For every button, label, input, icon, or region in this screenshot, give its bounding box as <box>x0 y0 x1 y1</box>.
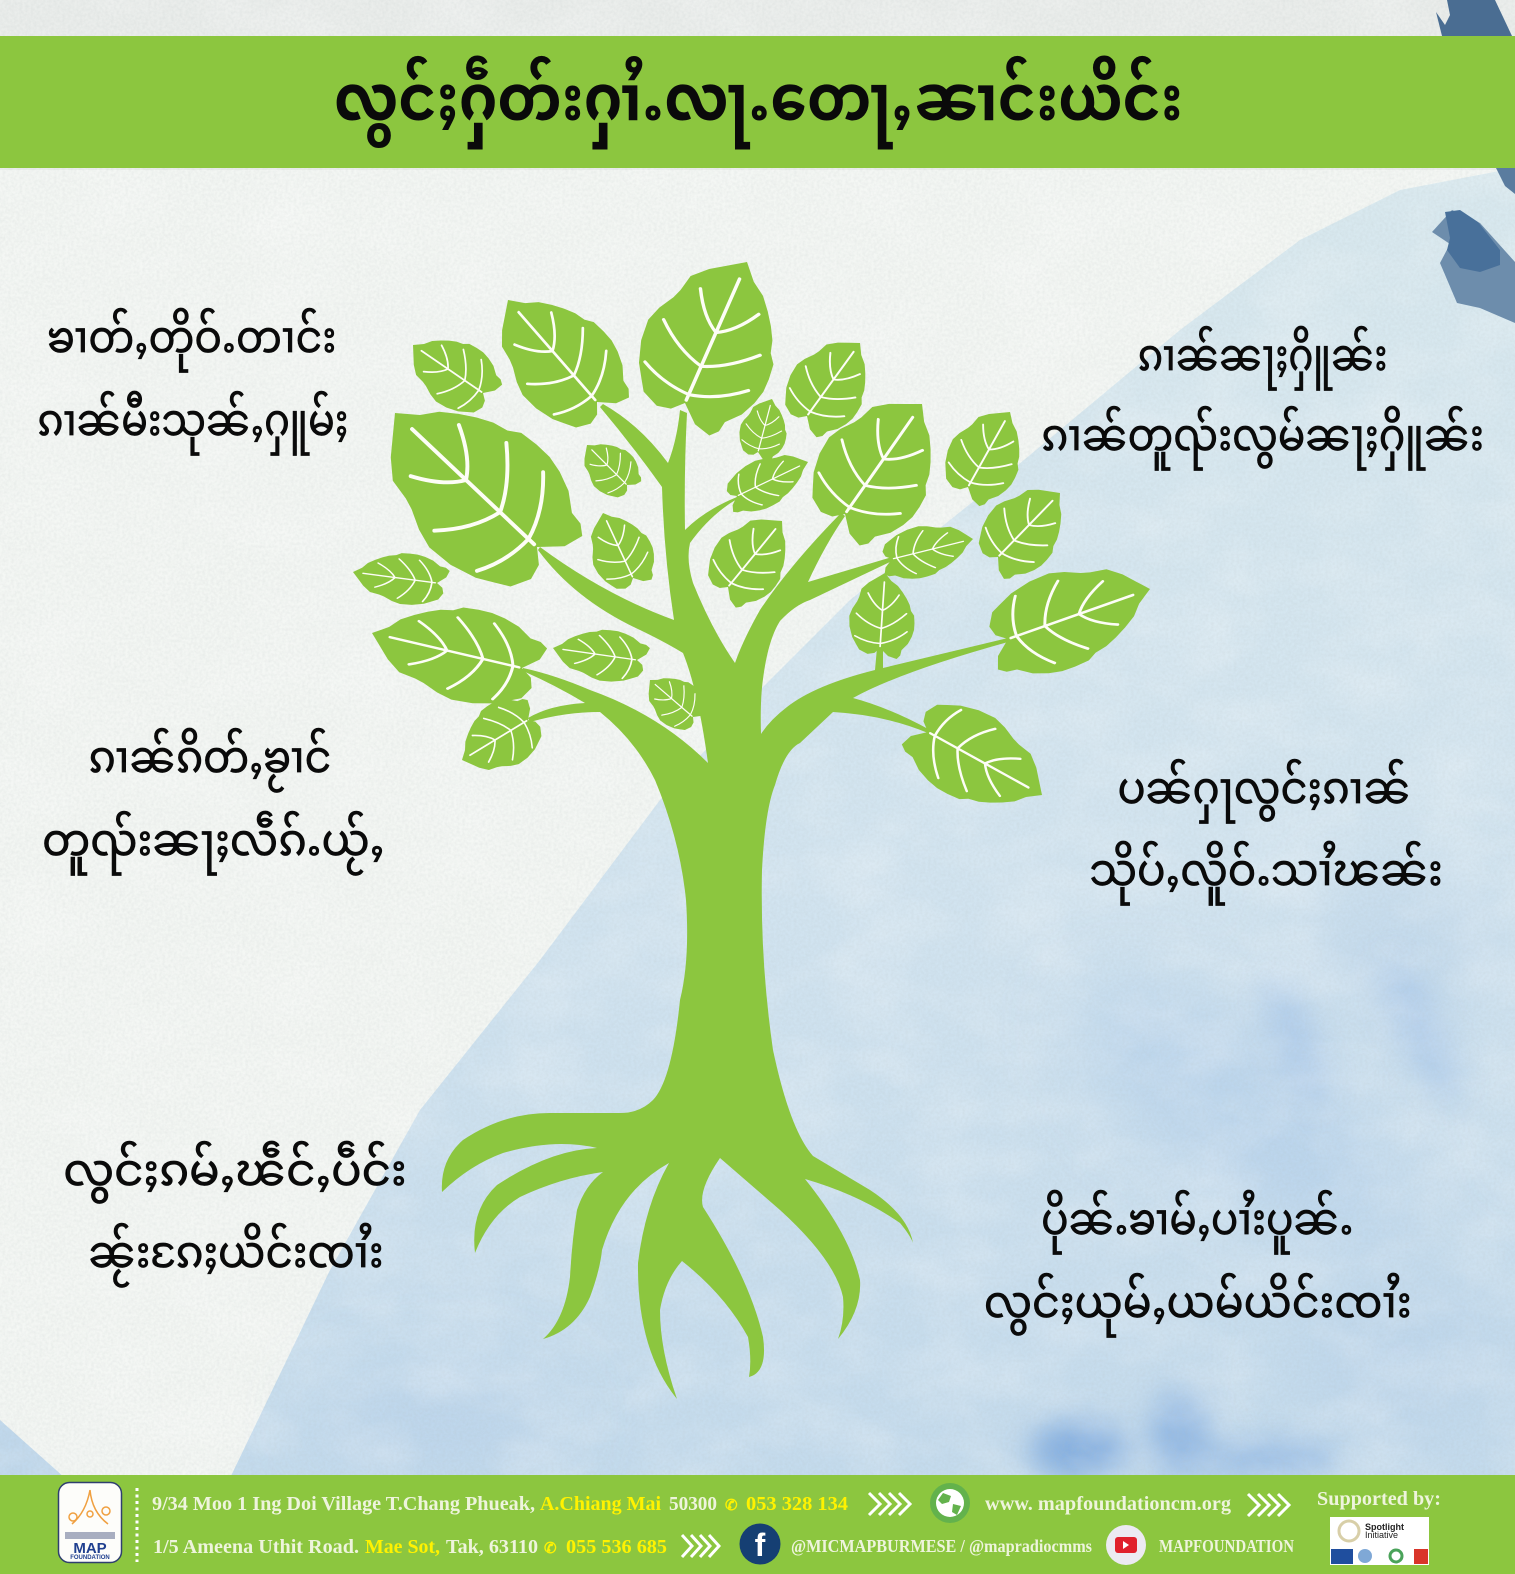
title: လွင်ႈႁဵတ်းႁၢႆႉလႃႉတေႃႇၼၢင်းယိင်း <box>334 54 1183 150</box>
text block: right bottom: လွင်ႈယုမ်ႇယမ်ယိင်းၸၢႆး <box>984 1272 1412 1338</box>
text block: left bottom: လွင်ႈၵမ်ႇၽဵင်ႇပဵင်း <box>63 1140 407 1204</box>
icon: chevrons 2 <box>1248 1494 1289 1516</box>
social handles: @MICMAPBURMESE / @mapradiocmms <box>791 1536 1092 1556</box>
address line 1: ✆ <box>725 1498 738 1514</box>
leaf 19 <box>963 467 1087 591</box>
leaf 2: top left <box>469 266 647 449</box>
text block: left bottom <box>63 1140 407 1288</box>
youtube channel: MAPFOUNDATION <box>1159 1536 1294 1556</box>
icon: youtube <box>1106 1525 1146 1565</box>
leaf 5 <box>570 428 649 507</box>
icon: facebook <box>740 1524 780 1564</box>
address line 2 <box>153 1536 667 1558</box>
background: blue watercolor panel <box>230 168 1515 1478</box>
leaf 1: large left <box>344 359 606 618</box>
text block: right top: ၵၢၼ်တူၺ်းလွမ်ၼႃႈႁိူၼ်း <box>1041 405 1484 471</box>
leaf 22 <box>892 685 1064 834</box>
title band <box>0 36 1515 168</box>
text block: right top <box>1041 325 1484 471</box>
leaf 15 <box>788 371 969 561</box>
icon: MAP Foundation logo: MAP <box>73 1540 107 1557</box>
text block: left top: ၶၢတ်ႇတိုဝ်ႉတၢင်း <box>47 307 336 373</box>
leaf 8 <box>361 587 552 718</box>
icon: MAP Foundation logo: FOUNDATION <box>70 1555 110 1561</box>
text block: left middle <box>42 727 385 876</box>
supported by label: Supported by: <box>1317 1488 1441 1510</box>
background: lower-left blue corner <box>0 1420 65 1478</box>
brush mark: upper right edge <box>1496 168 1515 194</box>
text block: left top: ၵၢၼ်မီးသုၼ်ႇႁူမ်ႈ <box>37 390 348 456</box>
address line 2: 055 536 685 <box>566 1536 667 1558</box>
icon: chevrons 3 <box>682 1535 719 1557</box>
sponsor logos: Initiative <box>1365 1530 1398 1540</box>
leaf 3: top centre <box>615 235 809 448</box>
address line 2: Tak, 63110 <box>446 1536 538 1558</box>
sponsor logos <box>1330 1517 1429 1565</box>
text block: left middle: တူၺ်းၼႃႈလဵၵ်ႉယႂ်ႇ <box>42 810 385 876</box>
tree trunk, branches and roots <box>442 404 1008 1399</box>
icon: globe <box>930 1483 970 1523</box>
icon: facebook: f <box>755 1527 766 1563</box>
icon: chevrons 1 <box>869 1493 910 1515</box>
text block: left middle: ၵၢၼ်ၵိတ်ႇၶႂၢင် <box>88 727 331 793</box>
leaf 9 <box>549 623 652 687</box>
text block: right bottom: ပိုၼ်ႉၶၢမ်ႇပၢႆးပူၼ်ႉ <box>1041 1189 1353 1255</box>
address line 1: A.Chiang Mai <box>540 1493 661 1515</box>
leaf 10 <box>634 662 714 740</box>
address line 2: ✆ <box>544 1541 557 1557</box>
leaf 13 <box>769 321 891 448</box>
leaf 6 <box>575 500 665 599</box>
leaf 18 <box>875 514 979 586</box>
leaf 21 <box>974 543 1166 691</box>
footer band <box>0 1475 1515 1574</box>
website: www. mapfoundationcm.org <box>985 1493 1231 1515</box>
text block: right top: ၵၢၼ်ၼႃႈႁိူၼ်း <box>1138 325 1388 391</box>
brush mark: top right <box>1436 0 1512 36</box>
address line 1 <box>152 1493 848 1515</box>
address line 2: 1/5 Ameena Uthit Road. <box>153 1536 359 1558</box>
address line 1: 053 328 134 <box>746 1493 848 1515</box>
leaf 17 <box>693 498 810 618</box>
leaf 7 <box>350 547 451 610</box>
text block: right bottom <box>984 1189 1412 1338</box>
sponsor logos: Spotlight <box>1365 1522 1404 1532</box>
text block: right middle <box>1089 759 1443 906</box>
leaf 20 <box>847 571 918 660</box>
address line 1: 9/34 Moo 1 Ing Doi Village T.Chang Phueak, <box>152 1493 535 1515</box>
leaf 16 <box>931 394 1042 515</box>
text block: left bottom: ၼႂ်းၵႄႈယိင်းၸၢႆး <box>88 1222 384 1288</box>
leaf 12 <box>733 393 795 465</box>
leaf 11 <box>445 687 554 788</box>
address line 2: Mae Sot, <box>365 1536 440 1558</box>
address line 1: 50300 <box>669 1493 717 1515</box>
text block: left top <box>37 307 348 456</box>
text block: right middle: သိုပ်ႇလိူဝ်ႉသၢႆၽၼ်း <box>1089 840 1443 906</box>
tree illustration <box>344 235 1166 1399</box>
leaf 4 <box>394 317 511 427</box>
brush mark: right <box>1432 210 1515 323</box>
icon: MAP Foundation logo <box>58 1482 122 1562</box>
leaf 14 <box>718 440 818 522</box>
text block: right middle: ပၼ်ႁႃလွင်ႈၵၢၼ် <box>1117 759 1411 824</box>
